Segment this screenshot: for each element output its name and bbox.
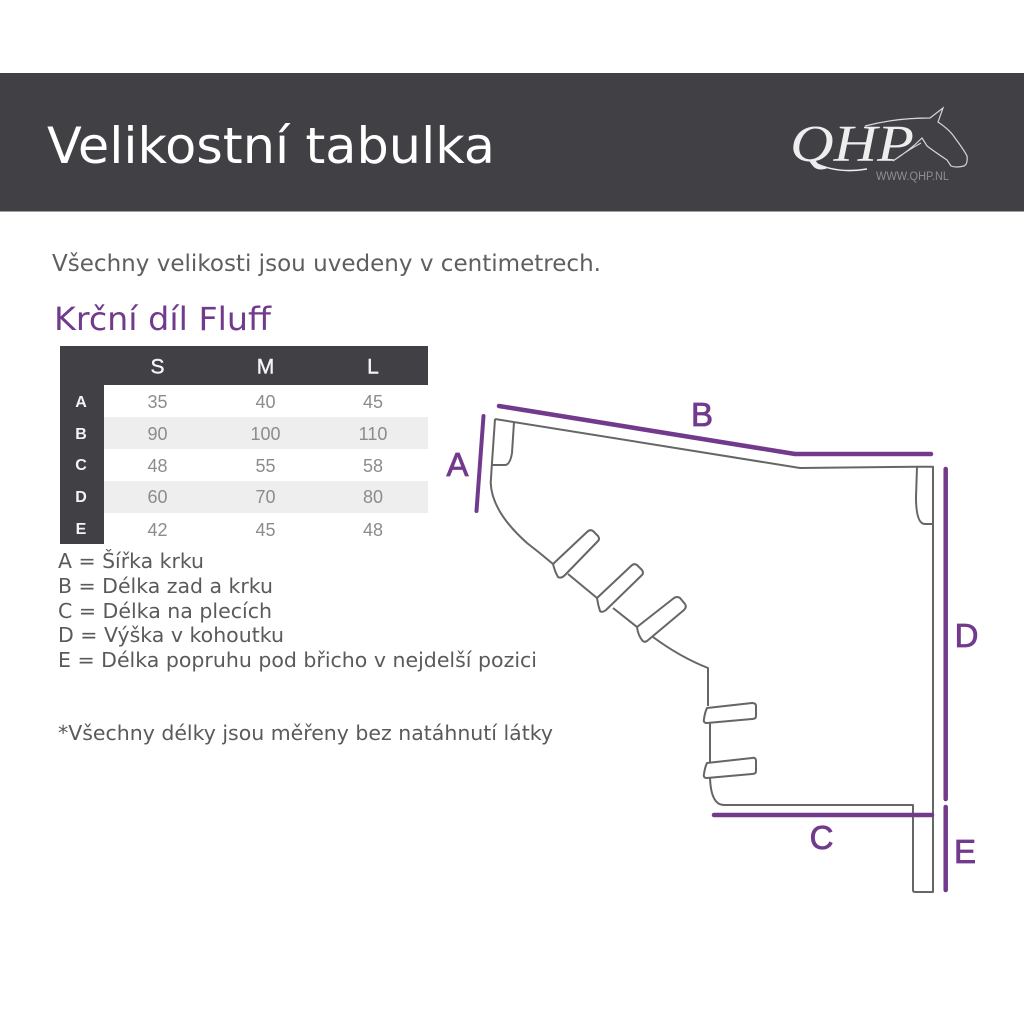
header band [0,73,1024,212]
dimension line C [714,813,932,817]
size table: A [75,394,87,411]
legend text: B = Délka zad a krku [58,574,273,598]
size table: 40 [255,392,276,412]
size table: 80 [363,487,383,507]
legend text: E = Délka popruhu pod břicho v nejdelší pozici [58,648,537,672]
legend text: D = Výška v kohoutku [58,623,284,647]
garment diagram [446,396,978,892]
dimension line A [476,416,484,511]
size table: L [367,356,379,378]
chest straps [704,703,756,723]
title: Velikostní tabulka [47,117,495,175]
size table: E [76,521,87,538]
dimension letters: C [810,819,833,856]
size table [60,346,428,544]
size table: 35 [147,392,168,412]
dimension line D [943,469,948,799]
logo: QHP horse [790,108,967,183]
dimension letters: B [691,396,713,433]
size table: 55 [255,456,276,476]
size table: 110 [359,424,387,444]
dimension line E [943,807,948,890]
size table: D [75,489,87,506]
dimension letters: A [446,446,469,483]
size table: 48 [147,456,168,476]
product heading: Krční díl Fluff [54,300,272,338]
size table: 58 [363,456,383,476]
size table: 60 [147,487,168,507]
footnote: *Všechny délky jsou měřeny bez natáhnutí látky [58,721,553,745]
size table: 45 [255,520,276,540]
subtitle: Všechny velikosti jsou uvedeny v centimetrech. [52,251,601,277]
size table: 70 [255,487,276,507]
legend text: A = Šířka krku [58,548,204,573]
size table: M [257,356,274,378]
dimension line B [499,406,931,454]
logo: QHP horse: WWW.QHP.NL [876,171,950,183]
logo: QHP horse: QHP [790,116,914,173]
legend text: C = Délka na plecích [58,599,272,623]
dimension letters: D [955,617,978,654]
size table: S [150,356,165,378]
size table: 100 [250,424,281,444]
size table: C [75,457,87,474]
size table: 42 [147,520,168,540]
dimension letters [446,396,978,870]
size table: B [75,426,87,443]
neck straps [553,530,599,578]
size table: 90 [147,424,168,444]
garment outline [491,419,933,892]
size table: 48 [363,520,383,540]
legend text [58,548,537,672]
dimension letters: E [954,833,976,870]
size table: 45 [363,392,383,412]
